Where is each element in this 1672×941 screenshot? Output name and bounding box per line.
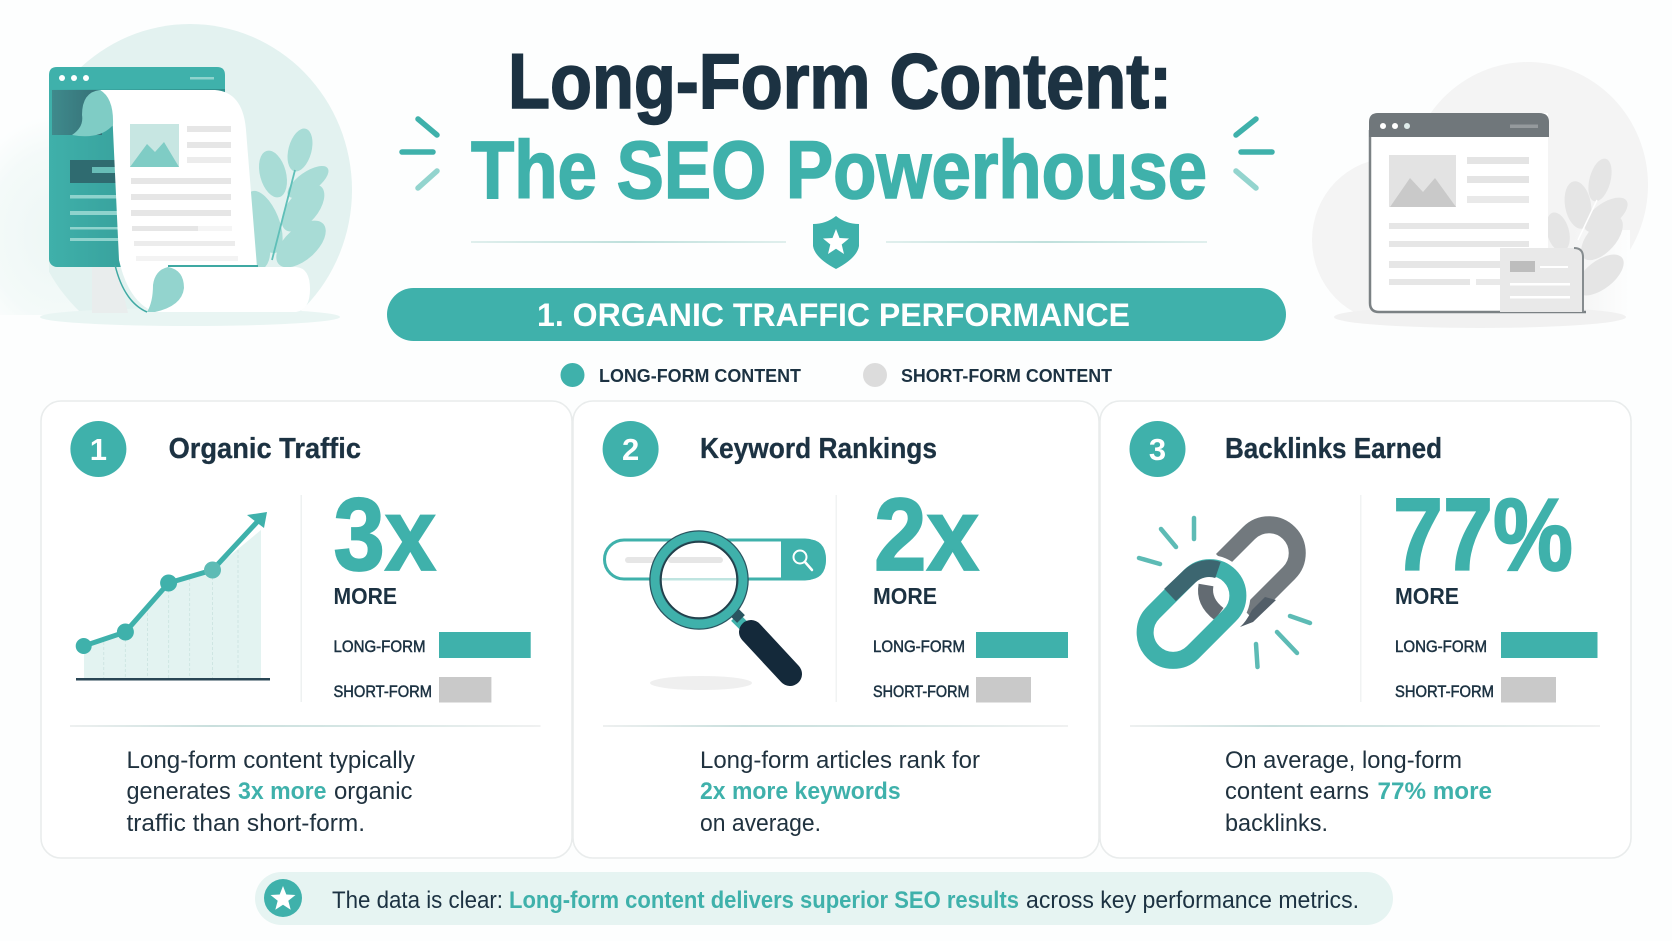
- panel: keyword rankings: 2: [622, 432, 639, 467]
- description: on average.: [700, 810, 821, 837]
- title divider with shield: [471, 216, 1207, 269]
- panel: keyword rankings: 2x: [874, 477, 979, 592]
- comparison bars: SHORT-FORM: [334, 683, 432, 701]
- panel: keyword rankings: Keyword Rankings: [700, 433, 937, 465]
- section banner: 1. ORGANIC TRAFFIC PERFORMANCE: [537, 297, 1130, 333]
- description: organic: [334, 778, 412, 805]
- callout: conclusion bar: Long-form content delivers superior SEO results: [509, 887, 1019, 914]
- panel: backlinks earned: 77%: [1393, 477, 1573, 592]
- comparison bars: LONG-FORM: [334, 638, 426, 656]
- panel: organic traffic: MORE: [334, 583, 397, 609]
- icon: search bar and magnifying glass: [604, 536, 826, 690]
- comparison bars: [334, 632, 531, 702]
- panel: organic traffic: 1: [90, 432, 107, 467]
- description: content earns: [1225, 778, 1369, 805]
- panel: backlinks earned: Backlinks Earned: [1225, 433, 1442, 465]
- illustration: scrolling article on browser window: [0, 24, 352, 356]
- comparison bars: LONG-FORM: [1395, 638, 1487, 656]
- icon: left sparkle rays: [402, 119, 437, 188]
- comparison bars: [873, 632, 1068, 702]
- panel: organic traffic: 3x: [334, 477, 436, 592]
- description: Long-form articles rank for: [700, 747, 980, 774]
- title: Long-Form Content:: [508, 37, 1172, 125]
- callout: conclusion bar: [255, 872, 1393, 925]
- description: On average, long-form: [1225, 747, 1462, 774]
- title: The SEO Powerhouse: [471, 125, 1207, 216]
- panel: backlinks earned: [1100, 401, 1631, 858]
- description: [700, 747, 980, 837]
- comparison bars: [1395, 632, 1598, 702]
- illustration: grey short-form web page: [1312, 62, 1648, 328]
- title: [471, 37, 1207, 216]
- description: Long-form content typically: [126, 747, 415, 774]
- comparison bars: SHORT-FORM: [1395, 683, 1494, 701]
- legend: LONG-FORM CONTENT: [599, 365, 802, 386]
- panel: backlinks earned: MORE: [1395, 583, 1459, 609]
- panel: backlinks earned: 3: [1149, 432, 1166, 467]
- panel: organic traffic: [41, 401, 572, 858]
- description: backlinks.: [1225, 810, 1328, 837]
- panel: keyword rankings: MORE: [873, 583, 937, 609]
- comparison bars: SHORT-FORM: [873, 683, 970, 701]
- legend: SHORT-FORM CONTENT: [901, 365, 1113, 386]
- section banner: [387, 288, 1286, 341]
- callout: conclusion bar: across key performance metrics.: [1026, 887, 1359, 914]
- description: generates: [126, 778, 231, 805]
- icon: chain link: [1134, 518, 1310, 672]
- comparison bars: LONG-FORM: [873, 638, 965, 656]
- panel: organic traffic: Organic Traffic: [169, 433, 361, 465]
- description: 3x more: [238, 778, 326, 805]
- line chart: [76, 512, 270, 680]
- description: [1225, 747, 1492, 837]
- legend: [560, 363, 1113, 387]
- description: [126, 747, 415, 837]
- description: 2x more keywords: [700, 778, 901, 805]
- description: traffic than short-form.: [126, 810, 365, 837]
- panel: keyword rankings: [573, 401, 1099, 858]
- callout: conclusion bar: The data is clear:: [332, 887, 503, 914]
- description: 77% more: [1378, 778, 1492, 805]
- icon: right sparkle rays: [1236, 119, 1272, 188]
